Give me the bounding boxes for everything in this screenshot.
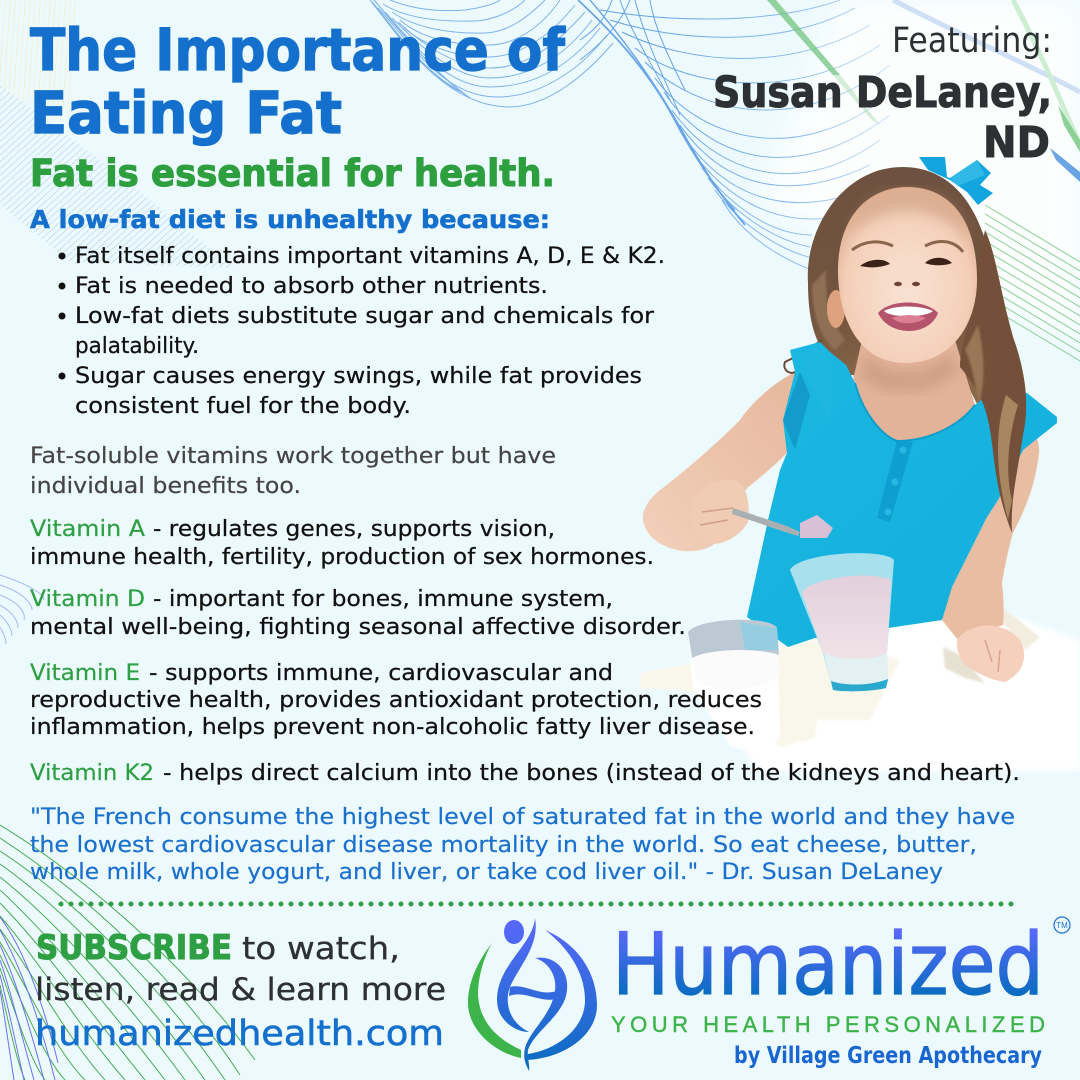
low-fat heading: A low-fat diet is unhealthy because: (30, 205, 550, 234)
quote (30, 805, 1015, 885)
placket and buttons (877, 440, 913, 522)
featuring (713, 21, 1052, 168)
bullet list: Fat is needed to absorb other nutrients. (75, 274, 548, 299)
title: Eating Fat (30, 79, 342, 147)
smile (878, 302, 938, 331)
vitamin K2: - helps direct calcium into the bones (instead of the kidneys and heart). (163, 761, 1020, 786)
ear (827, 290, 845, 328)
vitamin A: Vitamin A (30, 517, 145, 542)
logo: Humanized (468, 915, 1070, 1071)
subtitle: Fat is essential for health. (30, 152, 555, 195)
hair front strands (960, 230, 1026, 533)
trademark: TM (1056, 921, 1068, 930)
title: The Importance of (30, 16, 566, 84)
subscribe call to action: humanizedhealth.com (35, 1014, 444, 1054)
title (30, 16, 566, 147)
vitamin E: inflammation, helps prevent non-alcoholic fatty liver disease. (30, 715, 755, 740)
vitamin E: Vitamin E (30, 661, 140, 686)
vitamin E: - supports immune, cardiovascular and (149, 661, 613, 686)
vitamin A: - regulates genes, supports vision, (153, 517, 555, 542)
hair back (808, 167, 1026, 435)
intro text: individual benefits too. (30, 474, 301, 499)
dress (747, 342, 1057, 647)
vitamin E: reproductive health, provides antioxidant protection, reduces (30, 688, 762, 713)
neck (853, 340, 975, 442)
quote: whole milk, whole yogurt, and liver, or take cod liver oil." - Dr. Susan DeLaney (30, 860, 943, 885)
table (640, 608, 1080, 770)
nose (886, 263, 926, 289)
vitamin D: mental well-being, fighting seasonal affective disorder. (30, 615, 686, 640)
subscribe call to action (35, 928, 446, 1054)
vitamin E (30, 661, 762, 740)
quote: "The French consume the highest level of saturated fat in the world and they have (30, 805, 1015, 830)
quote: the lowest cardiovascular disease mortality in the world. So eat cheese, butter, (30, 833, 977, 858)
eyes and brows (852, 241, 963, 267)
subscribe call to action: to watch, (242, 931, 400, 967)
dotted divider (61, 902, 1012, 906)
trademark (1054, 917, 1070, 933)
featuring: Featuring: (892, 21, 1052, 61)
bullet list (58, 244, 665, 419)
face (838, 187, 977, 363)
vitamin A: immune health, fertility, production of sex hormones. (30, 545, 654, 570)
vitamin A (30, 517, 654, 570)
milk glass (688, 620, 780, 749)
vitamin D: - important for bones, immune system, (153, 587, 613, 612)
bullet list: Low-fat diets substitute sugar and chemicals for (75, 304, 655, 329)
hand with spoon (690, 480, 833, 544)
subscribe call to action: SUBSCRIBE (36, 928, 232, 968)
bullet list: palatability. (75, 334, 199, 359)
intro text: Fat-soluble vitamins work together but have (30, 444, 556, 469)
bullet list: consistent fuel for the body. (75, 394, 411, 419)
photo: girl eating yogurt (640, 157, 1080, 770)
vitamin D: Vitamin D (30, 587, 145, 612)
vitamin D (30, 587, 686, 640)
vitamin K2: Vitamin K2 (30, 761, 154, 786)
featuring: ND (983, 118, 1050, 168)
logo icon (468, 918, 597, 1071)
tagline: YOUR HEALTH PERSONALIZED (611, 1012, 1045, 1037)
intro text (30, 444, 556, 499)
yogurt glass (790, 553, 894, 691)
forehead shadow (848, 190, 970, 240)
bullet list: Sugar causes energy swings, while fat provides (75, 364, 642, 389)
left arm (643, 372, 795, 551)
right arm (942, 420, 1039, 640)
hair bow (919, 157, 993, 205)
hair strand wisp (784, 340, 822, 373)
bullet list: Fat itself contains important vitamins A, D, E & K2. (75, 244, 665, 269)
right hand (957, 625, 1024, 682)
subscribe call to action: listen, read & learn more (35, 972, 446, 1008)
